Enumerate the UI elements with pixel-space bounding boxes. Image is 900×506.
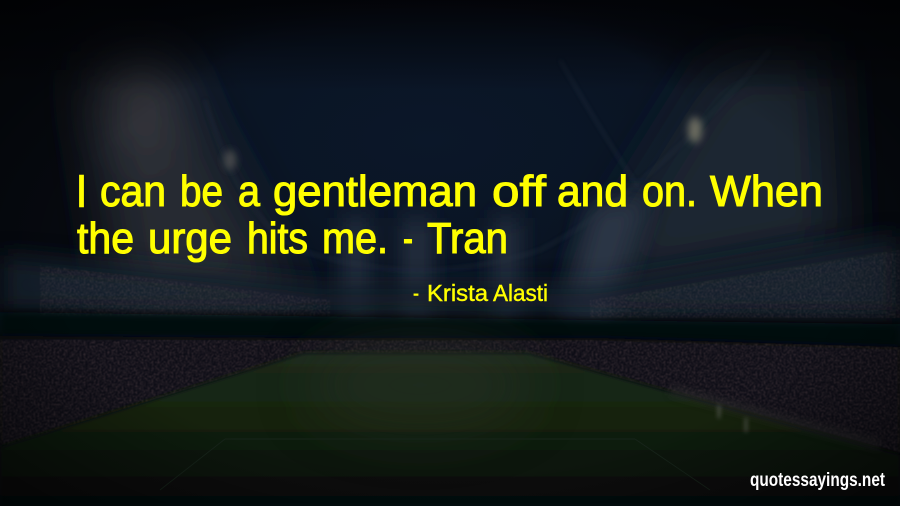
- quote text line 1: on.: [642, 167, 697, 216]
- quote text line 2: [77, 214, 508, 263]
- crowd stands: [0, 336, 900, 455]
- dugout: [670, 385, 880, 450]
- quote text line 1: [77, 167, 823, 216]
- quote text line 1: When: [710, 167, 823, 216]
- light shafts: [345, 195, 650, 323]
- quote text line 1: off: [492, 167, 547, 216]
- roof arcs: [205, 50, 770, 270]
- quote text line 1: I: [77, 167, 86, 216]
- quote text line 2: the: [77, 214, 134, 263]
- right floodlight glow: [570, 60, 840, 300]
- shadow band under upper stands: [0, 312, 900, 347]
- pitch centre glow: [310, 340, 530, 430]
- author attribution: Alasti: [493, 280, 548, 306]
- upper stands: [0, 235, 900, 318]
- pitch: [0, 353, 900, 506]
- quote text line 2: urge: [148, 214, 232, 263]
- quote text line 1: and: [557, 167, 628, 216]
- quote text line 1: a: [238, 167, 260, 216]
- upper crowd noise: [40, 250, 900, 318]
- quote text line 2: -: [403, 214, 413, 263]
- author attribution: [413, 280, 548, 306]
- author attribution: -: [413, 280, 419, 306]
- quote text line 2: Tran: [427, 214, 508, 263]
- author attribution: Krista: [427, 280, 488, 306]
- floodlight spots: [224, 117, 702, 170]
- quote text line 1: can: [100, 167, 166, 216]
- pitch lines: [160, 439, 710, 490]
- quote text line 1: be: [180, 167, 223, 216]
- quote text line 2: hits: [247, 214, 308, 263]
- top fade: [0, 0, 900, 90]
- quote text line 2: me.: [322, 214, 388, 263]
- left floodlight glow: [85, 55, 300, 310]
- quote text line 1: gentleman: [273, 167, 477, 216]
